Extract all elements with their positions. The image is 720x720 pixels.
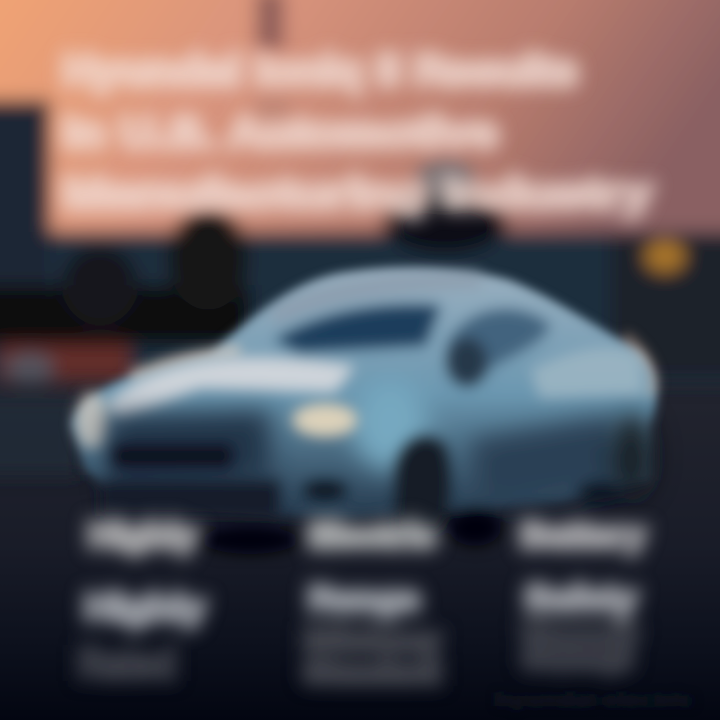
stat 1 heading: Highly: [88, 514, 198, 555]
stat 1 description: Rated: [78, 639, 176, 688]
stat 2 description: [304, 624, 440, 689]
stat 3 description: Coverage: [522, 644, 632, 674]
stat 3 value: Safety: [524, 577, 638, 618]
stat 2 heading: Electric: [308, 514, 436, 555]
stat 3 description: [522, 620, 639, 674]
bonnet highlight: [105, 357, 355, 418]
title: Manufacturing Industry: [62, 169, 653, 218]
grille and lower front: [105, 410, 270, 490]
front fender light area: [352, 380, 428, 470]
blue car: [70, 267, 657, 554]
background: dark wet road: [0, 370, 720, 720]
rear quarter highlight: [530, 348, 645, 398]
footer caption: hyundai electric: [495, 690, 695, 710]
front wheel: [395, 436, 450, 530]
stat column 2: [304, 514, 440, 689]
stat 3 description: Warranty: [522, 620, 639, 650]
stat column 1: [78, 514, 206, 688]
roof highlight: [270, 272, 482, 325]
wheel arch shadow: [303, 480, 347, 500]
rear wheel: [612, 413, 652, 497]
headlight: [293, 404, 357, 436]
stat column 3: [520, 514, 646, 674]
title: In U.S. Automotive: [62, 108, 498, 157]
side window: [449, 309, 550, 380]
stat 2 description: Standard: [304, 656, 440, 689]
car body: [70, 267, 657, 520]
windscreen: [275, 305, 440, 352]
rear side panel: [470, 415, 625, 505]
stat 3 heading: Battery: [520, 514, 646, 555]
title: Hyundai Ioniq 5 Results: [62, 46, 578, 95]
title: [62, 46, 653, 218]
stat 1 value: Highly: [84, 587, 206, 629]
background: sunset sky and dusk skyline: [0, 0, 720, 475]
car shadow under bumper: [202, 526, 298, 554]
stat 2 value: Range: [308, 580, 420, 618]
stat 2 description: Efficiency: [304, 624, 440, 657]
